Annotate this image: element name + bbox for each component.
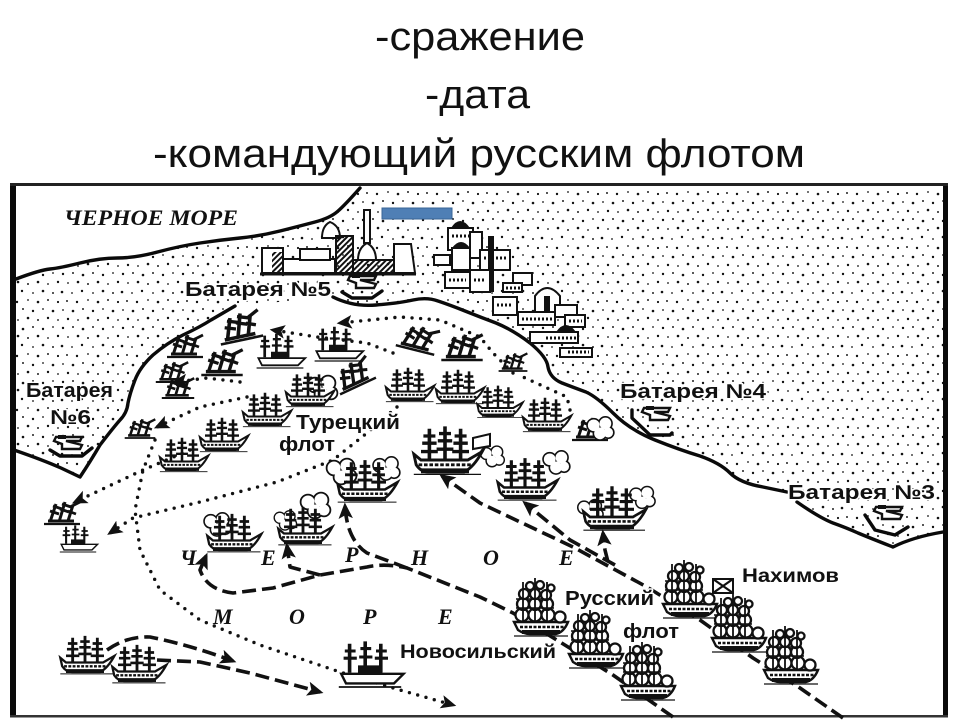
land with stipple (14, 186, 943, 547)
label: Russian fleet: флот (623, 621, 679, 643)
label: Turkish fleet: Турецкий (296, 412, 400, 434)
label: battery 4: Батарея №4 (620, 381, 767, 403)
label: battery 3: Батарея №3 (788, 482, 935, 504)
label: spaced Black Sea on the water: Р (362, 604, 377, 629)
fortress (260, 210, 416, 274)
label: Turkish fleet: флот (279, 434, 335, 456)
label: Russian fleet (565, 588, 679, 643)
label: Russian fleet: Русский (565, 588, 654, 610)
label: Nakhimov: Нахимов (742, 566, 839, 587)
label: spaced Black Sea on the water: Ч (180, 545, 198, 570)
icon: batteries (50, 276, 908, 535)
label: battery 6: №6 (50, 407, 91, 429)
title line: commander: -командующий русским флотом (153, 132, 805, 176)
label: spaced Black Sea on the water: Н (410, 545, 429, 570)
label: Turkish fleet (279, 412, 400, 456)
label: spaced Black Sea on the water: Е (260, 545, 276, 570)
Turkish ships under fire (60, 426, 655, 687)
dotted routes: Turkish ships (75, 317, 570, 705)
flag on Turkish ship (473, 434, 490, 449)
label: battery 6 (26, 380, 113, 429)
title line: date: -дата (425, 73, 531, 117)
label: spaced Black Sea on the water: Е (558, 545, 574, 570)
label: spaced Black Sea on the water (180, 542, 574, 629)
label: spaced Black Sea on the water: Р (344, 542, 359, 567)
label: spaced Black Sea on the water: О (483, 545, 499, 570)
label: Novosilsky: Новосильский (400, 642, 556, 663)
label: battery 6: Батарея (26, 380, 113, 402)
map frame (10, 183, 948, 718)
coastline (14, 188, 943, 547)
title line: battle: -сражение (375, 15, 585, 59)
panel: battle map (10, 183, 948, 718)
blue redaction bar (382, 208, 452, 219)
label: Black Sea: ЧЕРНОЕ МОРЕ (64, 205, 238, 230)
dashed routes: Russian ships (107, 476, 843, 718)
map labels (26, 205, 935, 663)
city (434, 221, 592, 357)
label: spaced Black Sea on the water: Е (437, 604, 453, 629)
label: spaced Black Sea on the water: О (289, 604, 305, 629)
Turkish fleet ships (44, 310, 614, 552)
label: spaced Black Sea on the water: М (212, 604, 234, 629)
icon: St Andrew flag (713, 579, 733, 593)
Russian fleet ships (514, 560, 818, 700)
label: battery 5: Батарея №5 (185, 279, 331, 301)
title (153, 15, 805, 176)
